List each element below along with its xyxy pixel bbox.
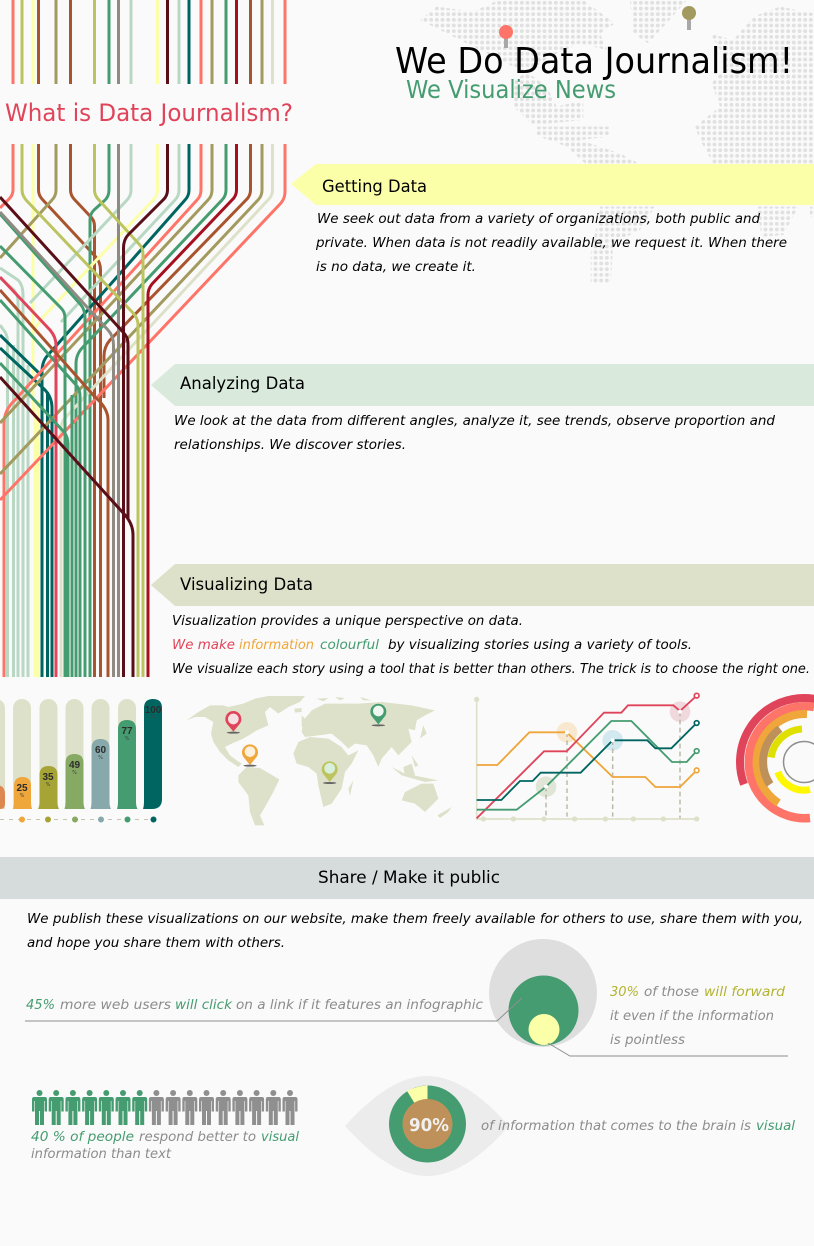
stat: 30 percent: 30% (610, 985, 639, 1000)
section: visualizing data: We visualize each story using a tool that is better than others. The trick is to choose the right one. (172, 662, 810, 677)
section: analyzing data: relationships. We discover stories. (174, 438, 406, 453)
bar chart: % (72, 770, 77, 776)
section: analyzing data: Analyzing Data (180, 374, 305, 394)
dotted world map background (420, 0, 814, 284)
section: visualizing data: by visualizing stories using a variety of tools. (388, 638, 692, 653)
stat: 45 percent: 45% (26, 998, 55, 1013)
stat: 90 percent: visual (756, 1119, 795, 1134)
heading: what is data journalism: What is Data Journalism? (5, 99, 293, 127)
stat: 30 percent: is pointless (610, 1033, 685, 1048)
section: getting data: We seek out data from a variety of organizations, both public and (317, 212, 761, 227)
nested circle chart (25, 939, 788, 1056)
stat: 40 percent: respond better to (139, 1130, 256, 1145)
stat: 40 percent: 40 % of people (31, 1130, 134, 1145)
section: getting data: is no data, we create it. (316, 260, 476, 275)
bar chart: 77 (121, 726, 133, 737)
section: share: We publish these visualizations on our website, make them freely available for others to use, share them with you, (27, 912, 803, 927)
section: share (0, 857, 814, 951)
radial arc chart (740, 698, 814, 818)
subtitle: We Visualize News (406, 75, 616, 104)
stat: 45 percent: will click (175, 998, 232, 1013)
section: analyzing data: We look at the data from different angles, analyze it, see trends, observe proportion and (174, 414, 776, 429)
main title: We Do Data Journalism! (395, 41, 793, 82)
stat: 30 percent: will forward (704, 985, 786, 1000)
bar chart: % (125, 736, 130, 742)
map pin: coral (499, 25, 513, 48)
stat: 45 percent (26, 998, 483, 1013)
pictogram: people (32, 1090, 298, 1125)
stat: 30 percent (610, 985, 786, 1048)
map pin: khaki (682, 6, 696, 30)
stat: 90 percent: of information that comes to the brain is (481, 1119, 751, 1134)
section: visualizing data: Visualization provides a unique perspective on data. (172, 614, 523, 629)
bar chart: 35 (42, 772, 54, 783)
section: share: and hope you share them with others. (27, 936, 285, 951)
pin: olive (322, 761, 338, 784)
bar chart (0, 699, 170, 829)
stat: 45 percent: on a link if it features an infographic (236, 998, 483, 1013)
stat: 30 percent: of those (644, 985, 699, 1000)
bar chart: % (46, 782, 51, 788)
bar chart: 100 (145, 705, 162, 716)
pin: green (370, 704, 386, 726)
stat: 40 percent (31, 1130, 299, 1162)
section: visualizing data: We make (172, 638, 235, 653)
stat: 30 percent: it even if the information (610, 1009, 774, 1024)
pin: orange (242, 744, 258, 767)
section: visualizing data: Visualizing Data (180, 575, 313, 595)
section: share: Share / Make it public (318, 868, 500, 888)
bar chart: % (151, 714, 156, 720)
coloured data lines (0, 0, 285, 677)
stat: 45 percent: more web users (60, 998, 171, 1013)
bar chart: % (20, 793, 25, 799)
stat: 40 percent: information than text (31, 1147, 172, 1162)
section: visualizing data: colourful (320, 638, 379, 653)
bar chart: 49 (69, 760, 80, 771)
section: visualizing data (151, 564, 814, 677)
title strip background (0, 84, 300, 144)
section: analyzing data (151, 364, 814, 453)
bar chart: 25 (16, 783, 28, 794)
pin: red (225, 711, 241, 734)
line chart (474, 693, 699, 822)
eye chart (345, 1076, 509, 1176)
eye chart: 90% (409, 1115, 449, 1136)
section: getting data: private. When data is not readily available, we request it. When there (315, 236, 787, 251)
stat: 40 percent: visual (261, 1130, 299, 1145)
section: getting data (291, 164, 814, 275)
bar chart: 60 (95, 745, 106, 756)
section: visualizing data: information (239, 638, 314, 653)
bar chart: % (98, 755, 103, 761)
section: getting data: Getting Data (322, 177, 427, 197)
world map with pins (187, 696, 452, 825)
